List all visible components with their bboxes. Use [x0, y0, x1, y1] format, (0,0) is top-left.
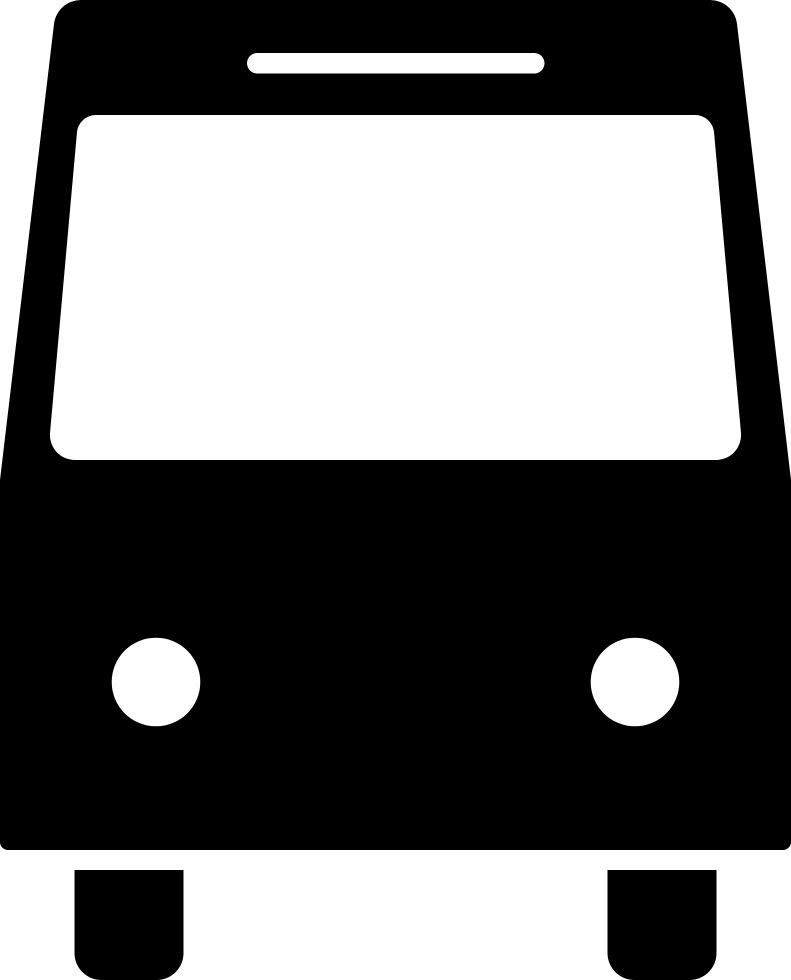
- left headlight: [112, 638, 200, 726]
- right headlight: [591, 638, 679, 726]
- right wheel: [608, 870, 716, 980]
- windshield: [50, 115, 741, 460]
- destination sign: [247, 53, 544, 74]
- left wheel: [74, 870, 184, 980]
